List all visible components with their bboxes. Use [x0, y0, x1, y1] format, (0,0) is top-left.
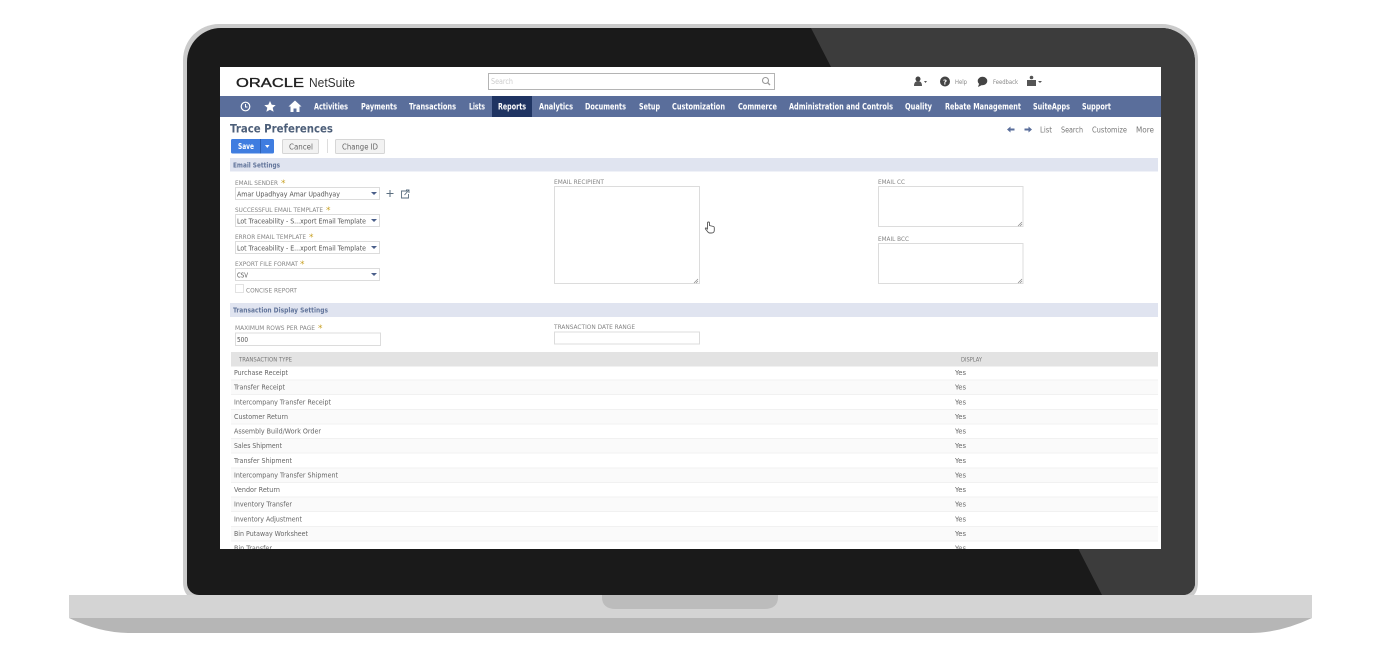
field: error email template: ERROR EMAIL TEMPLATE: [235, 233, 306, 241]
table rows: Yes: [954, 516, 966, 524]
section header: Transaction Display Settings: Transaction Display Settings: [233, 306, 328, 314]
table header: TRANSACTION TYPE: [238, 356, 292, 364]
checkbox: concise report: CONCISE REPORT: [246, 286, 297, 294]
field: email sender: *: [281, 179, 286, 189]
field: successful email template: Lot Traceability - S...xport Email Template: [237, 218, 366, 226]
table rows: Purchase Receipt: [234, 369, 288, 377]
field: successful email template: SUCCESSFUL EMAIL TEMPLATE: [235, 206, 323, 214]
field: export file format: EXPORT FILE FORMAT: [235, 260, 298, 268]
table rows: Sales Shipment: [234, 442, 282, 450]
field: maximum rows per page: MAXIMUM ROWS PER PAGE: [235, 324, 315, 332]
field: export file format: *: [300, 260, 305, 270]
table rows: Yes: [954, 472, 966, 480]
navigation bar: Rebate Management: [945, 102, 1021, 112]
field: email bcc: EMAIL BCC: [878, 235, 909, 243]
top right utility icons: ?: [943, 78, 947, 86]
table rows: Yes: [954, 413, 966, 421]
navigation bar: Documents: [585, 102, 626, 112]
navigation bar: Lists: [469, 102, 485, 112]
table rows: Yes: [954, 384, 966, 392]
field: export file format: CSV: [237, 272, 248, 280]
navigation bar: SuiteApps: [1033, 102, 1070, 112]
top right utility icons: [914, 76, 1042, 87]
table rows: Transfer Receipt: [233, 384, 285, 392]
checkbox: concise report: [236, 284, 297, 294]
transaction table: [231, 352, 1158, 552]
field: successful email template: [235, 206, 380, 226]
field: maximum rows per page: [235, 324, 380, 346]
navigation bar: Analytics: [539, 102, 573, 112]
table header: DISPLAY: [961, 356, 982, 364]
table rows: Yes: [954, 500, 966, 508]
table rows: Vendor Return: [234, 486, 280, 494]
field: email recipient: [554, 178, 700, 284]
table rows: Inventory Transfer: [234, 500, 292, 508]
navigation bar: [220, 96, 1161, 117]
table rows: Intercompany Transfer Shipment: [234, 472, 338, 480]
field: maximum rows per page: *: [318, 324, 323, 334]
table rows: Bin Putaway Worksheet: [234, 530, 308, 538]
field: error email template: *: [309, 233, 314, 243]
table rows: Yes: [954, 398, 966, 406]
field: transaction date range: TRANSACTION DATE RANGE: [553, 323, 635, 331]
section header: Transaction Display Settings: [230, 303, 1158, 317]
table rows: Yes: [954, 442, 966, 450]
table rows: Yes: [954, 428, 966, 436]
field: maximum rows per page: 500: [237, 336, 248, 344]
action buttons: Save: [238, 142, 254, 151]
field: error email template: [235, 233, 380, 254]
action buttons: Cancel: [289, 142, 313, 152]
top right utility icons: Help: [955, 79, 967, 86]
navigation bar: Activities: [314, 102, 348, 112]
table rows: Yes: [954, 530, 966, 538]
table rows: Intercompany Transfer Receipt: [234, 398, 331, 406]
table rows: Yes: [954, 369, 966, 377]
logo: Oracle NetSuite: NetSuite: [309, 75, 355, 90]
page links: Search: [1061, 126, 1083, 134]
top right utility icons: Feedback: [993, 79, 1018, 86]
global search box: Search: [491, 77, 513, 86]
table rows: Bin Transfer: [234, 544, 272, 552]
field: email cc: EMAIL CC: [878, 178, 905, 186]
screen: NetSuite Trace Preferences page: [220, 67, 1161, 552]
navigation bar: Payments: [361, 102, 397, 112]
page links: [1007, 126, 1154, 132]
field: error email template: Lot Traceability - E...xport Email Template: [237, 244, 366, 252]
page title: Trace Preferences: [230, 122, 333, 136]
field: export file format: [235, 260, 380, 280]
table rows: Yes: [954, 544, 966, 552]
action buttons: [231, 139, 384, 154]
table header: [231, 352, 1158, 366]
navigation bar: Customization: [672, 102, 725, 112]
section header: Email Settings: Email Settings: [233, 162, 280, 170]
page links: Customize: [1092, 126, 1127, 134]
navigation bar: Support: [1082, 102, 1111, 112]
navigation bar: Commerce: [738, 102, 777, 112]
field: email cc: [878, 178, 1023, 226]
icon: hand cursor: [705, 222, 714, 233]
navigation bar: Setup: [639, 102, 660, 112]
page links: List: [1040, 126, 1052, 134]
table rows: Assembly Build/Work Order: [234, 428, 321, 436]
logo: Oracle NetSuite: ORACLE: [236, 75, 304, 90]
table rows: [233, 369, 966, 552]
table rows: Transfer Shipment: [233, 457, 292, 465]
field: email bcc: [878, 235, 1023, 284]
field: email sender: [235, 179, 409, 200]
field: successful email template: *: [326, 206, 331, 216]
field: transaction date range: [553, 323, 700, 344]
navigation bar: Administration and Controls: [789, 102, 893, 112]
navigation bar: Quality: [905, 102, 932, 112]
global search box: [488, 74, 774, 90]
logo: Oracle NetSuite: [236, 78, 354, 88]
field: email recipient: EMAIL RECIPIENT: [554, 178, 604, 186]
page links: More: [1136, 126, 1154, 134]
table rows: Yes: [954, 486, 966, 494]
table rows: Customer Return: [234, 413, 288, 421]
nav icons: [241, 100, 302, 112]
field: email sender: Amar Upadhyay Amar Upadhyay: [237, 190, 340, 198]
section header: Email Settings: [230, 158, 1158, 172]
field: email sender: EMAIL SENDER: [235, 179, 278, 187]
laptop lid: [183, 24, 1198, 597]
navigation bar: Reports: [498, 102, 526, 112]
table rows: Yes: [954, 457, 966, 465]
laptop base: [69, 595, 1312, 633]
action buttons: Change ID: [342, 142, 378, 152]
navigation bar: Transactions: [409, 102, 456, 112]
table rows: Inventory Adjustment: [234, 516, 302, 524]
